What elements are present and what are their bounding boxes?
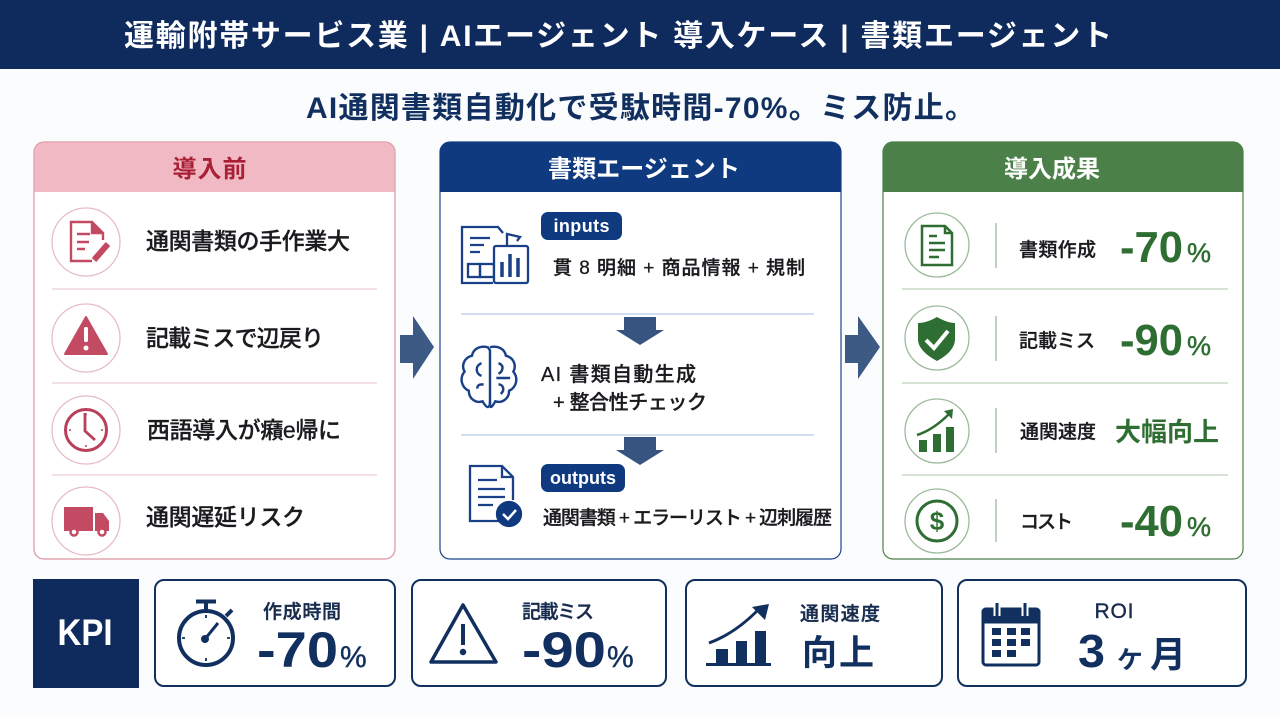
arrow: before to agent <box>400 316 434 379</box>
panel: document agent <box>440 142 841 559</box>
header band <box>0 0 1280 69</box>
KPI card: clearance speed <box>686 580 942 686</box>
icon: warning triangle <box>52 304 120 372</box>
row: clearance speed: 通関速度 <box>1020 421 1096 443</box>
unit: percent: % <box>607 641 634 674</box>
icon: dollar coin: $ <box>930 506 945 536</box>
arrow: agent to results <box>845 316 880 379</box>
heading: results: 導入成果 <box>1004 156 1100 183</box>
label: inputs <box>541 212 622 240</box>
row: clearance speed: 大幅向上 <box>1115 417 1219 447</box>
row: cost <box>1020 497 1211 546</box>
row: document creation: % <box>1187 238 1211 268</box>
text: outputs content: 通関書類 + エラーリスト + 辺刺履歴 <box>543 507 832 529</box>
value: minus 90: -90 <box>522 622 606 678</box>
icon: rising bars <box>706 604 771 666</box>
KPI label <box>33 579 139 688</box>
text: creation time label: 作成時間 <box>263 601 341 623</box>
arrow: down 1 <box>616 317 664 345</box>
value: minus 70: -70 <box>257 622 338 678</box>
value: 3 months: 月 <box>1150 634 1186 675</box>
icon: calendar <box>983 603 1039 665</box>
label: outputs: outputs <box>550 468 616 488</box>
text: slow introduction: 西語導入が癪e帰に <box>147 417 341 443</box>
text: manual work: 通関書類の手作業大 <box>146 228 350 254</box>
row: entry errors: 記載ミス <box>1019 330 1095 352</box>
icon: input documents <box>462 227 528 283</box>
text: entry errors: 記載ミスで辺戻り <box>146 325 324 351</box>
row: entry errors <box>1019 316 1211 365</box>
title: 運輸附帯サービス業 | AIエージェント 導入ケース | 書類エージェント <box>124 20 1112 53</box>
panel: before introduction <box>34 142 395 559</box>
heading: document agent: 書類エージェント <box>548 156 740 183</box>
KPI card: entry errors <box>412 580 666 686</box>
text: inputs content: 貫 8 明細 + 商品情報 + 規制 <box>553 257 805 279</box>
row: document creation: 書類作成 <box>1019 239 1096 261</box>
row: clearance speed <box>1020 417 1219 447</box>
row: cost: -40 <box>1120 497 1183 546</box>
heading: before: 導入前 <box>172 156 248 183</box>
KPI card: ROI <box>958 580 1246 686</box>
icon: dollar coin <box>905 489 969 553</box>
text: consistency check: + 整合性チェック <box>553 391 707 414</box>
icon: warning outline <box>431 605 496 662</box>
subtitle: AI通関書類自動化で受駄時間-70%。ミス防止。 <box>306 92 975 125</box>
label: inputs: inputs <box>554 216 610 236</box>
text: delay risk: 通関遅延リスク <box>146 504 305 530</box>
value: 3 months: ヶ <box>1115 641 1145 674</box>
icon: stopwatch <box>179 602 233 665</box>
value: 3 months <box>1078 625 1186 677</box>
row: document creation <box>1019 223 1211 272</box>
icon: clock <box>52 396 120 464</box>
text: clearance speed label: 通関速度 <box>800 603 880 625</box>
icon: checked document <box>470 466 521 526</box>
panel: results <box>883 142 1243 559</box>
text: entry errors label: 記載ミス <box>522 601 594 623</box>
icon: rising chart <box>905 399 969 463</box>
row: document creation: -70 <box>1120 223 1183 272</box>
icon: brain <box>462 347 516 407</box>
arrow: down 2 <box>616 437 664 465</box>
row: entry errors: -90 <box>1120 316 1183 365</box>
icon: shield check <box>905 306 969 370</box>
text: AI generation: AI 書類自動生成 <box>541 363 696 386</box>
value: 3 months: 3 <box>1078 625 1105 677</box>
value: improved: 向上 <box>802 634 874 673</box>
icon: document with pencil <box>52 208 120 276</box>
row: cost: % <box>1187 512 1211 542</box>
row: entry errors: % <box>1187 331 1211 361</box>
label: outputs <box>541 464 625 492</box>
icon: document <box>905 213 969 277</box>
row: cost: コスト <box>1020 512 1073 533</box>
KPI label: KPI <box>58 612 112 653</box>
icon: truck <box>52 487 120 555</box>
text: ROI label: ROI <box>1094 600 1134 623</box>
unit: percent: % <box>340 641 367 674</box>
KPI card: creation time <box>155 580 395 686</box>
